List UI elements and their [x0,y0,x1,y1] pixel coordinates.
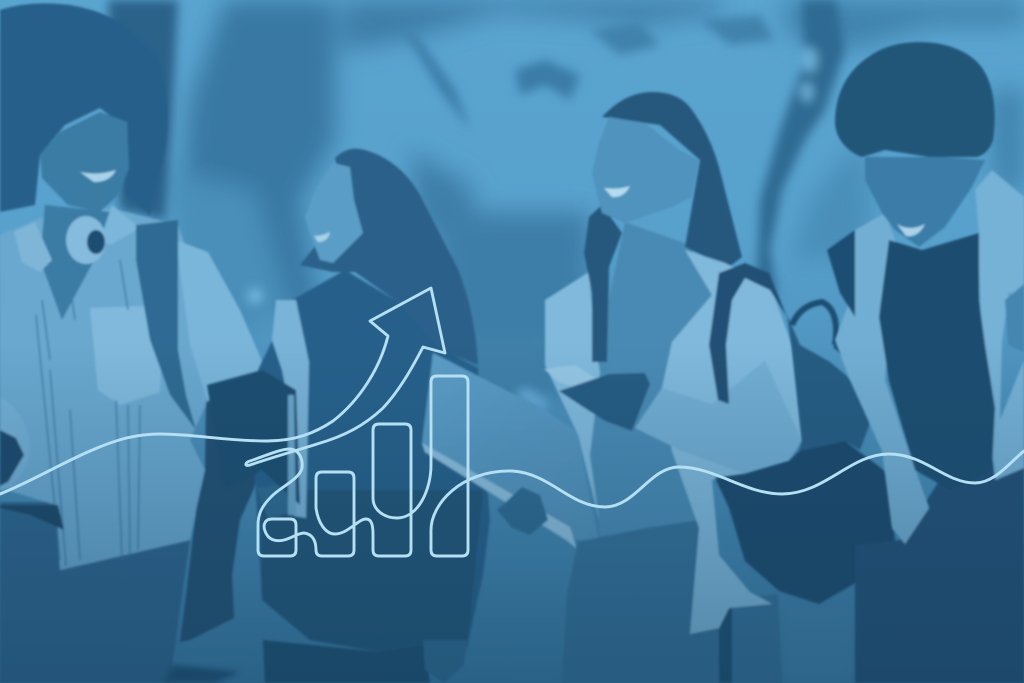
shirt body [0,208,208,570]
folder [422,353,599,543]
strap [827,230,855,317]
face [865,157,985,247]
headphones [14,222,52,272]
phone [544,365,605,392]
smile [604,186,630,197]
sleeve [635,360,802,474]
face [592,117,699,223]
face [40,112,129,212]
backpack strap [136,220,196,430]
face [305,163,363,263]
trousers [562,518,782,683]
sleeve [176,240,266,402]
notebook [272,300,309,518]
belt shadow [0,505,64,530]
person 4: student with afro and open shirt [827,42,1024,683]
right hand [423,640,467,683]
neck [40,205,110,320]
lower jacket shade [262,490,483,652]
backpack [715,302,895,604]
arm and hand [180,378,262,642]
left hand [257,484,290,520]
wave line, arrow and bars as a single continuous stroke [0,288,1024,556]
folder edge band [422,443,577,549]
hair strand [584,205,622,362]
strap [709,263,787,404]
left shirt [545,272,600,520]
hand on folder [497,487,548,535]
chest and belly [590,222,712,535]
jacket [255,270,490,652]
collar and shirt right [662,250,802,634]
hand [559,373,650,431]
shirt left [835,213,929,544]
smile [314,232,330,242]
hair [300,149,478,365]
afro [835,42,995,157]
person 1: student with afro and headphones [0,3,266,683]
handle loop [792,302,878,402]
collar [100,205,140,245]
trousers [263,640,430,683]
hair [602,92,742,268]
ball [0,397,30,492]
smile [897,224,925,236]
hair [0,3,168,215]
trousers and lower dark area [855,450,1024,683]
pocket [90,306,162,405]
shirt right [975,170,1024,480]
upper body [787,315,878,451]
smile [80,170,116,182]
person 3: student with phone [544,92,802,683]
ground shadow [165,665,240,683]
growth chart line art with arrow and wave [0,288,1024,556]
trousers [0,502,190,683]
main body [715,441,895,604]
hand [1005,284,1024,352]
tee [879,233,995,490]
person 2: student with long hair and denim jacket [207,149,599,683]
shirt stripes [36,250,140,566]
